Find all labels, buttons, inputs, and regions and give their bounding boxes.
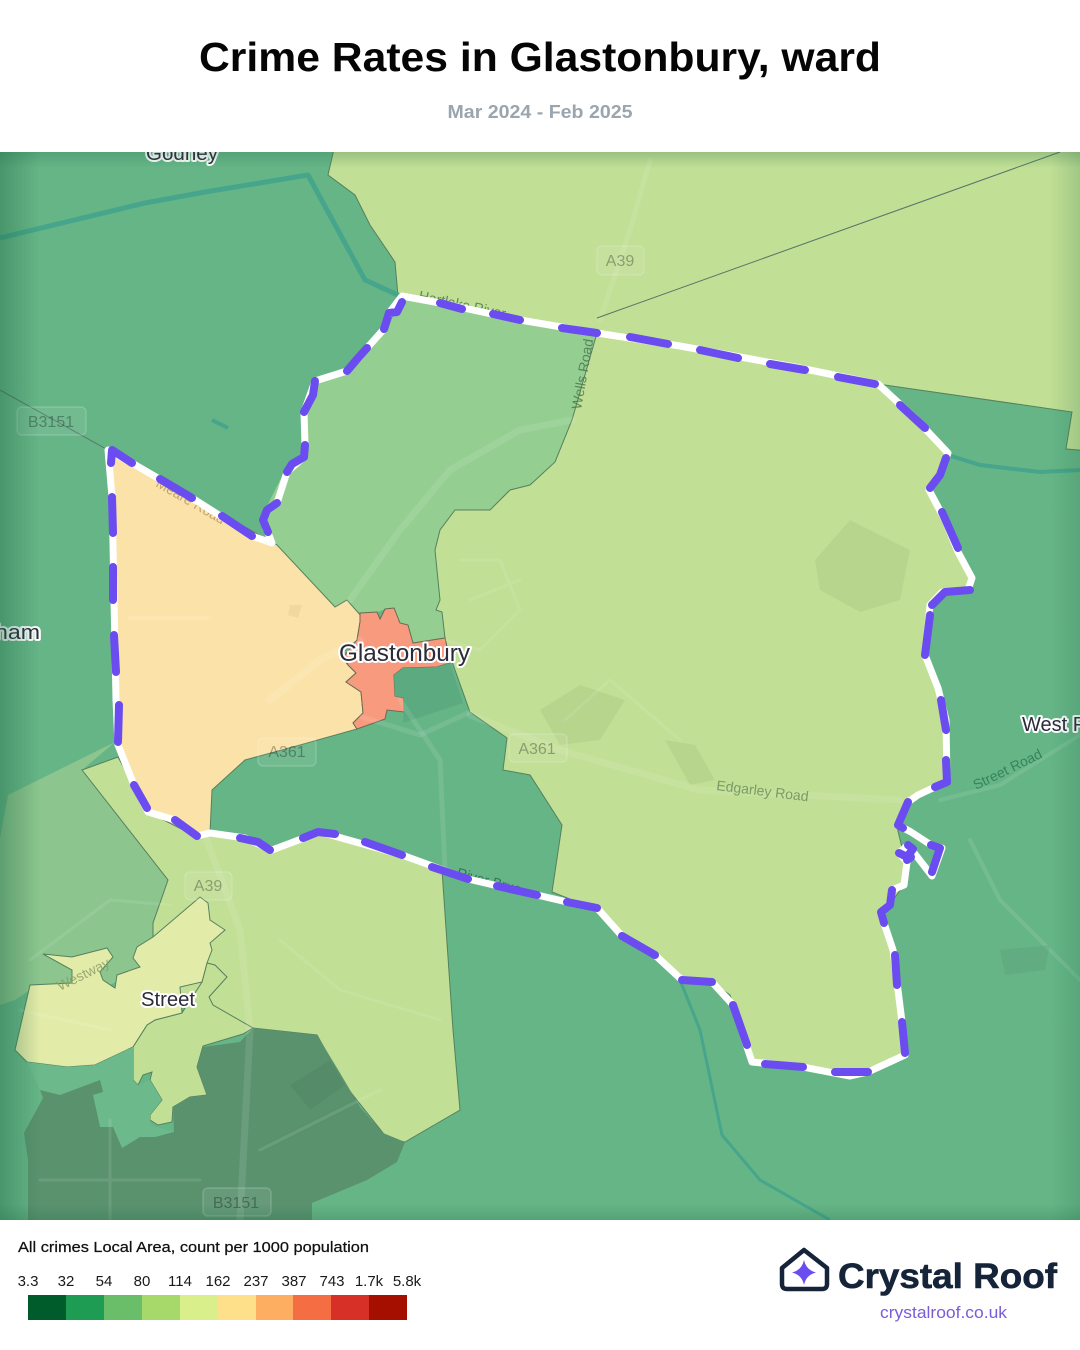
legend scale labels: 54 [96,1273,112,1290]
road labels: Meare Road [154,475,228,527]
place labels [0,143,1080,1011]
legend scale labels: 32 [58,1273,74,1290]
legend scale labels: 387 [281,1273,307,1290]
river network [0,175,1080,1220]
area: north Glastonbury mid band [262,296,597,643]
road network [20,160,1080,1220]
area: south-west edge mid band [27,1047,162,1120]
legend scale labels: 237 [243,1273,269,1290]
icon: Crystal Roof house logo [782,1250,827,1289]
legend scale labels: 5.8k [393,1273,422,1290]
area: east Glastonbury low band [435,333,972,1075]
area: west Glastonbury cream band [108,450,363,836]
road shields: A39 [194,878,222,895]
road shields: B3151 [213,1195,259,1212]
brand name: Crystal Roof [838,1257,1057,1296]
subtitle: date range: Mar 2024 - Feb 2025 [448,101,632,122]
road labels: Street Road [970,746,1044,793]
legend title: All crimes Local Area, count per 1000 population [18,1239,369,1256]
road labels: Edgarley Road [716,777,810,804]
road labels: River Brue [455,864,523,897]
legend scale labels: 3.3 [18,1273,38,1290]
road labels [54,287,1044,994]
legend scale labels: 114 [168,1273,192,1290]
area: south dark band [24,1028,405,1230]
area: Street centre pale band [15,897,225,1067]
ward boundary [108,296,972,1076]
legend colour bar [28,1295,407,1320]
area: north-east low band [328,140,1080,451]
road labels: Wells Road [568,337,596,411]
legend scale labels: 80 [134,1273,150,1290]
legend scale labels: 162 [205,1273,231,1290]
place labels: Street [141,989,195,1011]
area: Glastonbury south darker pocket [394,663,463,723]
brand url: crystalroof.co.uk [880,1304,1008,1322]
area: Glastonbury town centre salmon band [345,608,450,729]
road shields [17,246,644,1216]
road shields: B3151 [28,414,74,431]
map edge vignette [0,152,1080,1220]
area: south-west pale green band [82,757,460,1142]
building footprints [288,520,1050,951]
road shields: A361 [268,744,306,761]
place labels: Godney [146,143,218,165]
legend scale labels [18,1273,422,1290]
title: Crime Rates in Glastonbury, ward [199,34,881,80]
thin rail and field lines [0,152,1060,450]
legend scale labels: 1.7k [355,1273,384,1290]
road shields: A39 [606,253,634,270]
area: south-west mid band [0,742,170,1005]
road labels: Westway [54,955,112,994]
legend scale labels: 743 [319,1273,345,1290]
road labels: Hartlake River [417,287,508,321]
area: Street south band [133,963,253,1125]
road shields: A361 [518,741,556,758]
place labels: Glastonbury [339,640,470,667]
